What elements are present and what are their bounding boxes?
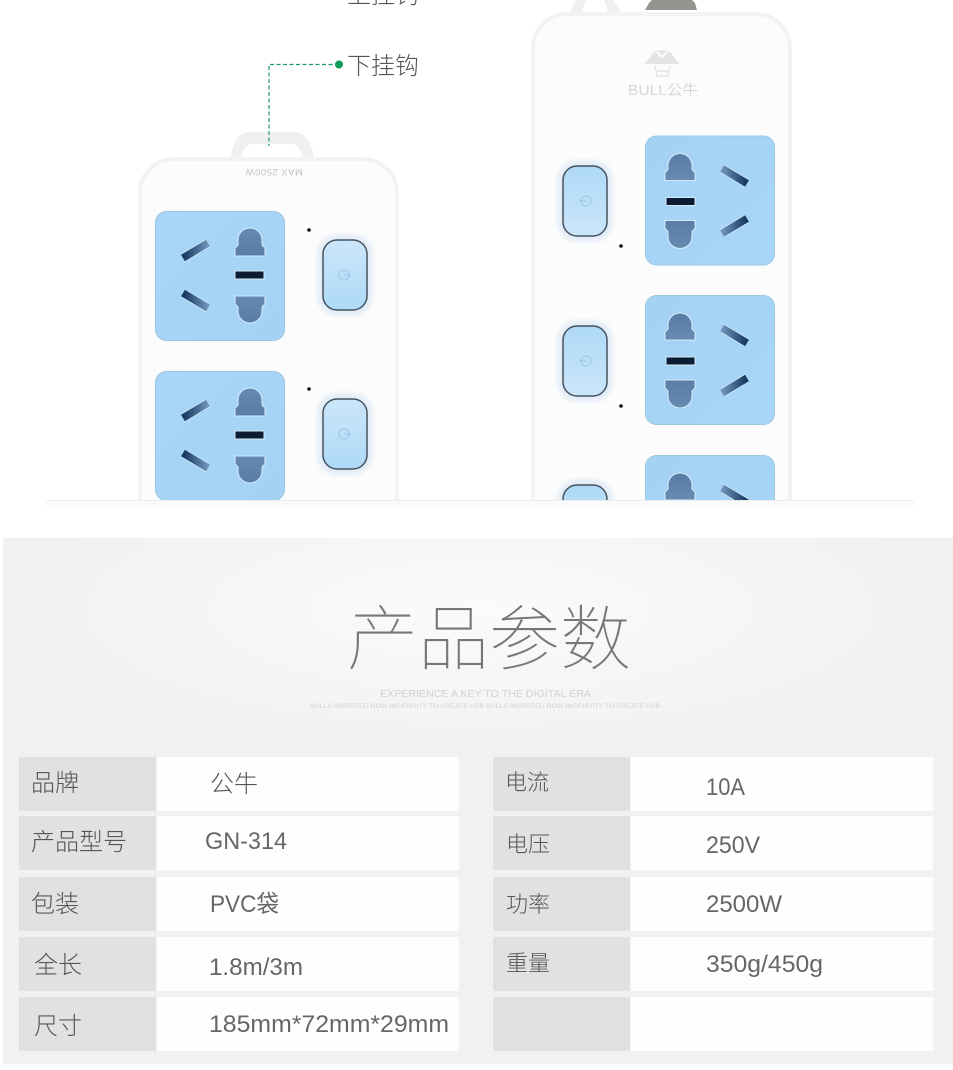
indicator 2 bbox=[307, 387, 311, 391]
row: voltage bbox=[493, 816, 933, 870]
row: weight: 350g/450g bbox=[706, 951, 823, 978]
table: left column bbox=[19, 757, 459, 1051]
table: right column bbox=[493, 757, 933, 1051]
row: current: 电流 bbox=[505, 765, 549, 797]
row: power: 功率 bbox=[506, 887, 550, 919]
indicator 1 bbox=[619, 244, 623, 248]
row: weight: 重量 bbox=[506, 946, 550, 978]
row: package bbox=[19, 877, 459, 931]
switch 2 bbox=[557, 320, 613, 402]
row: size: 185mm*72mm*29mm bbox=[209, 1011, 449, 1038]
switch 1 bbox=[317, 234, 373, 316]
row: model: 产品型号 bbox=[31, 822, 127, 857]
socket 3 bbox=[645, 455, 775, 500]
icon: upper hook legs bbox=[570, 0, 621, 12]
power strip: right bbox=[531, 0, 792, 500]
switch 1 bbox=[557, 160, 613, 242]
row: model bbox=[19, 816, 459, 870]
power strip: left bbox=[138, 132, 399, 500]
row: length: 全长 bbox=[34, 945, 82, 980]
icon: cord bbox=[645, 0, 697, 10]
label: lower hook: 下挂钩 bbox=[347, 46, 419, 81]
callout line: lower hook bbox=[269, 60, 343, 146]
text: max rating, upside down: MAX 2500W bbox=[245, 166, 303, 177]
row: package: PVC袋 bbox=[210, 891, 279, 918]
socket 1 bbox=[156, 212, 284, 340]
row: package: 包装 bbox=[31, 884, 79, 919]
row: power: 2500W bbox=[706, 891, 782, 918]
row: size: 尺寸 bbox=[34, 1006, 82, 1041]
strip body bbox=[138, 157, 399, 500]
row: power bbox=[493, 877, 933, 931]
row: voltage: 250V bbox=[706, 832, 760, 859]
switch 2 bbox=[317, 393, 373, 475]
row: model: GN-314 bbox=[205, 828, 287, 855]
row: brand bbox=[19, 757, 459, 811]
panel: product parameters bbox=[3, 538, 953, 1064]
row: size bbox=[19, 997, 459, 1051]
row: length bbox=[19, 937, 459, 991]
icon: lower hook bbox=[231, 132, 314, 157]
socket 2 bbox=[646, 296, 774, 424]
heading: 产品参数 bbox=[347, 583, 631, 685]
row: weight bbox=[493, 937, 933, 991]
indicator 1 bbox=[307, 228, 311, 232]
row: voltage: 电压 bbox=[506, 827, 550, 859]
row: brand: 品牌 bbox=[31, 763, 79, 798]
logo: BULL: BULL公牛 bbox=[628, 82, 698, 99]
indicator 2 bbox=[619, 404, 623, 408]
row: length: 1.8m/3m bbox=[209, 954, 303, 981]
subheading: EXPERIENCE A KEY TO THE DIGITAL ERA bbox=[380, 688, 591, 700]
subheading small: BULLS INSERTED ROW INGENUITY TO CREATE USB BULLS INSERTED ROW INGENUITY TO CREATE USB bbox=[310, 704, 660, 710]
switch 3 bbox=[556, 478, 614, 500]
strip body bbox=[531, 12, 792, 500]
socket 1 bbox=[646, 136, 774, 265]
row: empty bbox=[493, 997, 933, 1051]
logo: BULL bbox=[628, 50, 698, 99]
row: brand: 公牛 bbox=[210, 764, 258, 799]
row: current: 10A bbox=[706, 774, 745, 801]
row: current bbox=[493, 757, 933, 811]
socket 2 bbox=[156, 372, 284, 500]
